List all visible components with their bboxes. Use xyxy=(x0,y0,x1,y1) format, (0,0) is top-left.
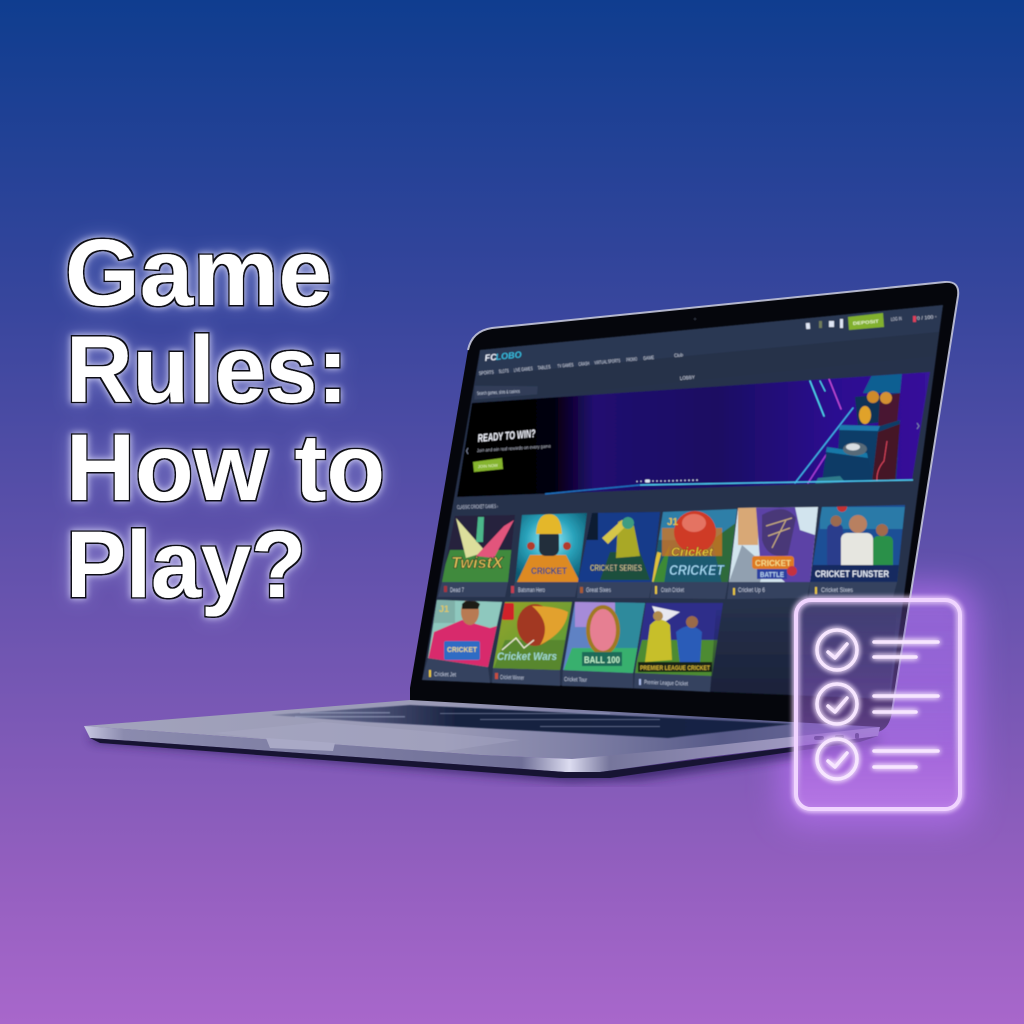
account controls: LOG IN xyxy=(891,316,902,323)
trackpad xyxy=(213,722,520,755)
game tile 1: TwistX xyxy=(451,555,504,572)
game tile 9 xyxy=(560,600,648,676)
navigation menu: PROMO xyxy=(626,357,638,364)
game captions: Dead 7 xyxy=(450,588,464,594)
logo: FC xyxy=(484,352,498,363)
side ports xyxy=(814,733,859,740)
game tile 4: J1 xyxy=(667,517,679,528)
game tile 3 xyxy=(578,510,663,585)
navigation menu: CRASH xyxy=(578,361,590,368)
dark underside xyxy=(90,736,878,778)
checklist item 1 xyxy=(817,630,938,670)
checklist glow behind laptop xyxy=(780,585,975,825)
keyboard highlights xyxy=(295,712,660,727)
game tile 10 xyxy=(634,602,724,676)
game tile 2: CRICKET xyxy=(531,566,567,576)
navigation menu: GAME xyxy=(643,355,655,362)
game captions xyxy=(429,586,853,688)
green call to action button xyxy=(473,458,503,472)
camera dot xyxy=(694,318,696,320)
laptop ground shadow xyxy=(90,734,880,782)
game tile 8: Cricket Wars xyxy=(497,651,557,663)
game tile 7 xyxy=(425,598,505,670)
game tile 7: J1 xyxy=(439,604,449,614)
game tile 8 xyxy=(490,600,575,672)
account controls: 0 / 100 ▫ xyxy=(917,314,937,322)
title: Game Rules: How to Play? xyxy=(65,220,385,618)
game tile 1 xyxy=(441,515,515,583)
game tile 6: CRICKET FUNSTER xyxy=(815,569,889,579)
checklist panel xyxy=(796,600,960,809)
navigation menu: SPORTS xyxy=(479,370,495,377)
game tile 5 xyxy=(725,505,820,585)
game tile 7: CRICKET xyxy=(447,647,478,654)
keyboard xyxy=(271,705,792,738)
trackpad notch xyxy=(266,738,335,751)
carousel dots xyxy=(636,479,698,482)
checklist icon xyxy=(796,600,960,809)
title: Game Rules: How to Play?: Rules: xyxy=(66,317,348,423)
game tile 4: CRICKET xyxy=(669,562,726,579)
account controls xyxy=(806,313,937,330)
game tile 4: Cricket xyxy=(671,545,714,559)
lower screen shading xyxy=(710,600,898,699)
checklist item 3 xyxy=(817,739,938,779)
section heading: CLASSIC CRICKET GAMES › xyxy=(457,504,498,511)
navigation menu: Club xyxy=(674,352,684,359)
game tile 10: PREMIER LEAGUE CRICKET xyxy=(640,665,710,672)
laptop xyxy=(84,282,958,782)
caption row 1 xyxy=(438,582,897,599)
game captions: Cricket Winner xyxy=(500,675,524,682)
search box xyxy=(474,382,538,400)
green call to action button: JOIN NOW xyxy=(478,463,498,469)
navigation menu: TV GAMES xyxy=(557,362,574,370)
header bar xyxy=(477,305,943,376)
checklist item 2 xyxy=(817,684,938,724)
hero banner xyxy=(457,372,930,497)
logo: LOBO xyxy=(495,349,522,362)
lid silver edge xyxy=(468,282,958,712)
sub-navigation bar xyxy=(473,332,939,403)
logo xyxy=(484,349,522,363)
laptop base front edge xyxy=(84,726,880,772)
game captions: Cricket Sixes xyxy=(821,588,853,594)
neon lines xyxy=(795,379,853,483)
game captions: Crash Cricket xyxy=(661,588,684,594)
title: Game Rules: How to Play?: Game xyxy=(65,220,332,326)
game tile 3: CRICKET SERIES xyxy=(590,563,642,573)
navigation menu: VIRTUAL SPORTS xyxy=(594,358,621,366)
game tile 9: BALL 100 xyxy=(584,655,620,665)
banner subtext: Join and win real rewards on every game xyxy=(477,443,551,453)
laptop base top surface xyxy=(84,700,880,759)
game captions: Great Sixes xyxy=(586,588,611,594)
navigation menu: TABLES xyxy=(537,364,551,372)
game tile 6 xyxy=(808,502,908,584)
screen base xyxy=(422,305,943,699)
bottom cyan glow line xyxy=(640,480,913,485)
lobby label: LOBBY xyxy=(680,375,696,382)
carousel arrows xyxy=(466,423,919,454)
laptop lid xyxy=(410,282,958,732)
search box: Search games, slots & casinos xyxy=(477,389,520,397)
game captions: Premier League Cricket xyxy=(644,680,688,688)
account controls: DEPOSIT xyxy=(853,319,879,326)
title: Game Rules: How to Play?: How to xyxy=(66,415,385,521)
game tile 5: CRICKET xyxy=(755,559,791,568)
game captions: Cricket Up 6 xyxy=(738,588,766,594)
game captions: Batsman Hero xyxy=(518,588,545,594)
laptop screen xyxy=(422,305,943,699)
deposit button xyxy=(848,313,884,330)
navigation menu xyxy=(479,352,684,377)
navigation menu: LIVE GAMES xyxy=(513,366,533,374)
game captions: Cricket Tour xyxy=(564,677,587,684)
caption row 2 xyxy=(422,658,712,692)
game tile 5: BATTLE xyxy=(760,572,784,579)
game captions: Cricket Jet xyxy=(434,672,456,679)
headline: READY TO WIN? xyxy=(477,428,536,445)
game tile 2 xyxy=(514,512,588,583)
arcade machine with coins xyxy=(815,373,902,484)
game tile 4 xyxy=(650,508,740,585)
title: Game Rules: How to Play?: Play? xyxy=(66,512,306,618)
navigation menu: SLOTS xyxy=(499,368,509,375)
